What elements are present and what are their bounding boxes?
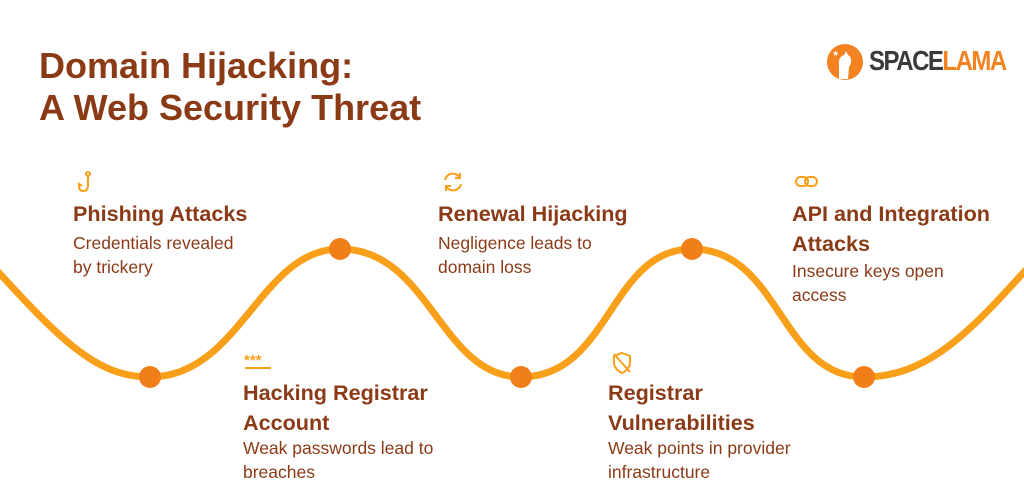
- logo: SPACELAMA: [869, 46, 1006, 77]
- icon: shield off: [613, 352, 631, 374]
- panel: registrar account: Weak passwords lead to breaches: [243, 438, 433, 482]
- panel: api: [792, 201, 990, 305]
- logo: ★: [832, 49, 839, 58]
- panel: phishing: Credentials revealed by trickery: [73, 233, 234, 277]
- icon: password: [244, 352, 271, 369]
- panel: renewal: Renewal Hijacking: [438, 201, 628, 226]
- panel: api: Insecure keys open access: [792, 261, 944, 305]
- panel: api: API and Integration Attacks: [792, 201, 990, 256]
- icon: link: [795, 176, 818, 187]
- title: [39, 45, 421, 128]
- panel: registrar vulnerabilities: [608, 380, 791, 482]
- panel: phishing: [73, 201, 247, 277]
- panel: renewal: [438, 201, 628, 277]
- logo: [827, 44, 1006, 80]
- icon: password: ***: [244, 352, 262, 369]
- panel: registrar vulnerabilities: Registrar Vulnerabilities: [608, 380, 755, 435]
- panel: renewal: Negligence leads to domain loss: [438, 233, 592, 277]
- icon: hook: [78, 171, 91, 192]
- panel: registrar account: [243, 380, 433, 482]
- panel: registrar account: Hacking Registrar Account: [243, 380, 428, 435]
- icon: refresh: [444, 172, 462, 192]
- panel: registrar vulnerabilities: Weak points in provider infrastructure: [608, 438, 791, 482]
- title: A Web Security Threat: [39, 87, 421, 128]
- title: Domain Hijacking:: [39, 45, 353, 86]
- panel: phishing: Phishing Attacks: [73, 201, 247, 226]
